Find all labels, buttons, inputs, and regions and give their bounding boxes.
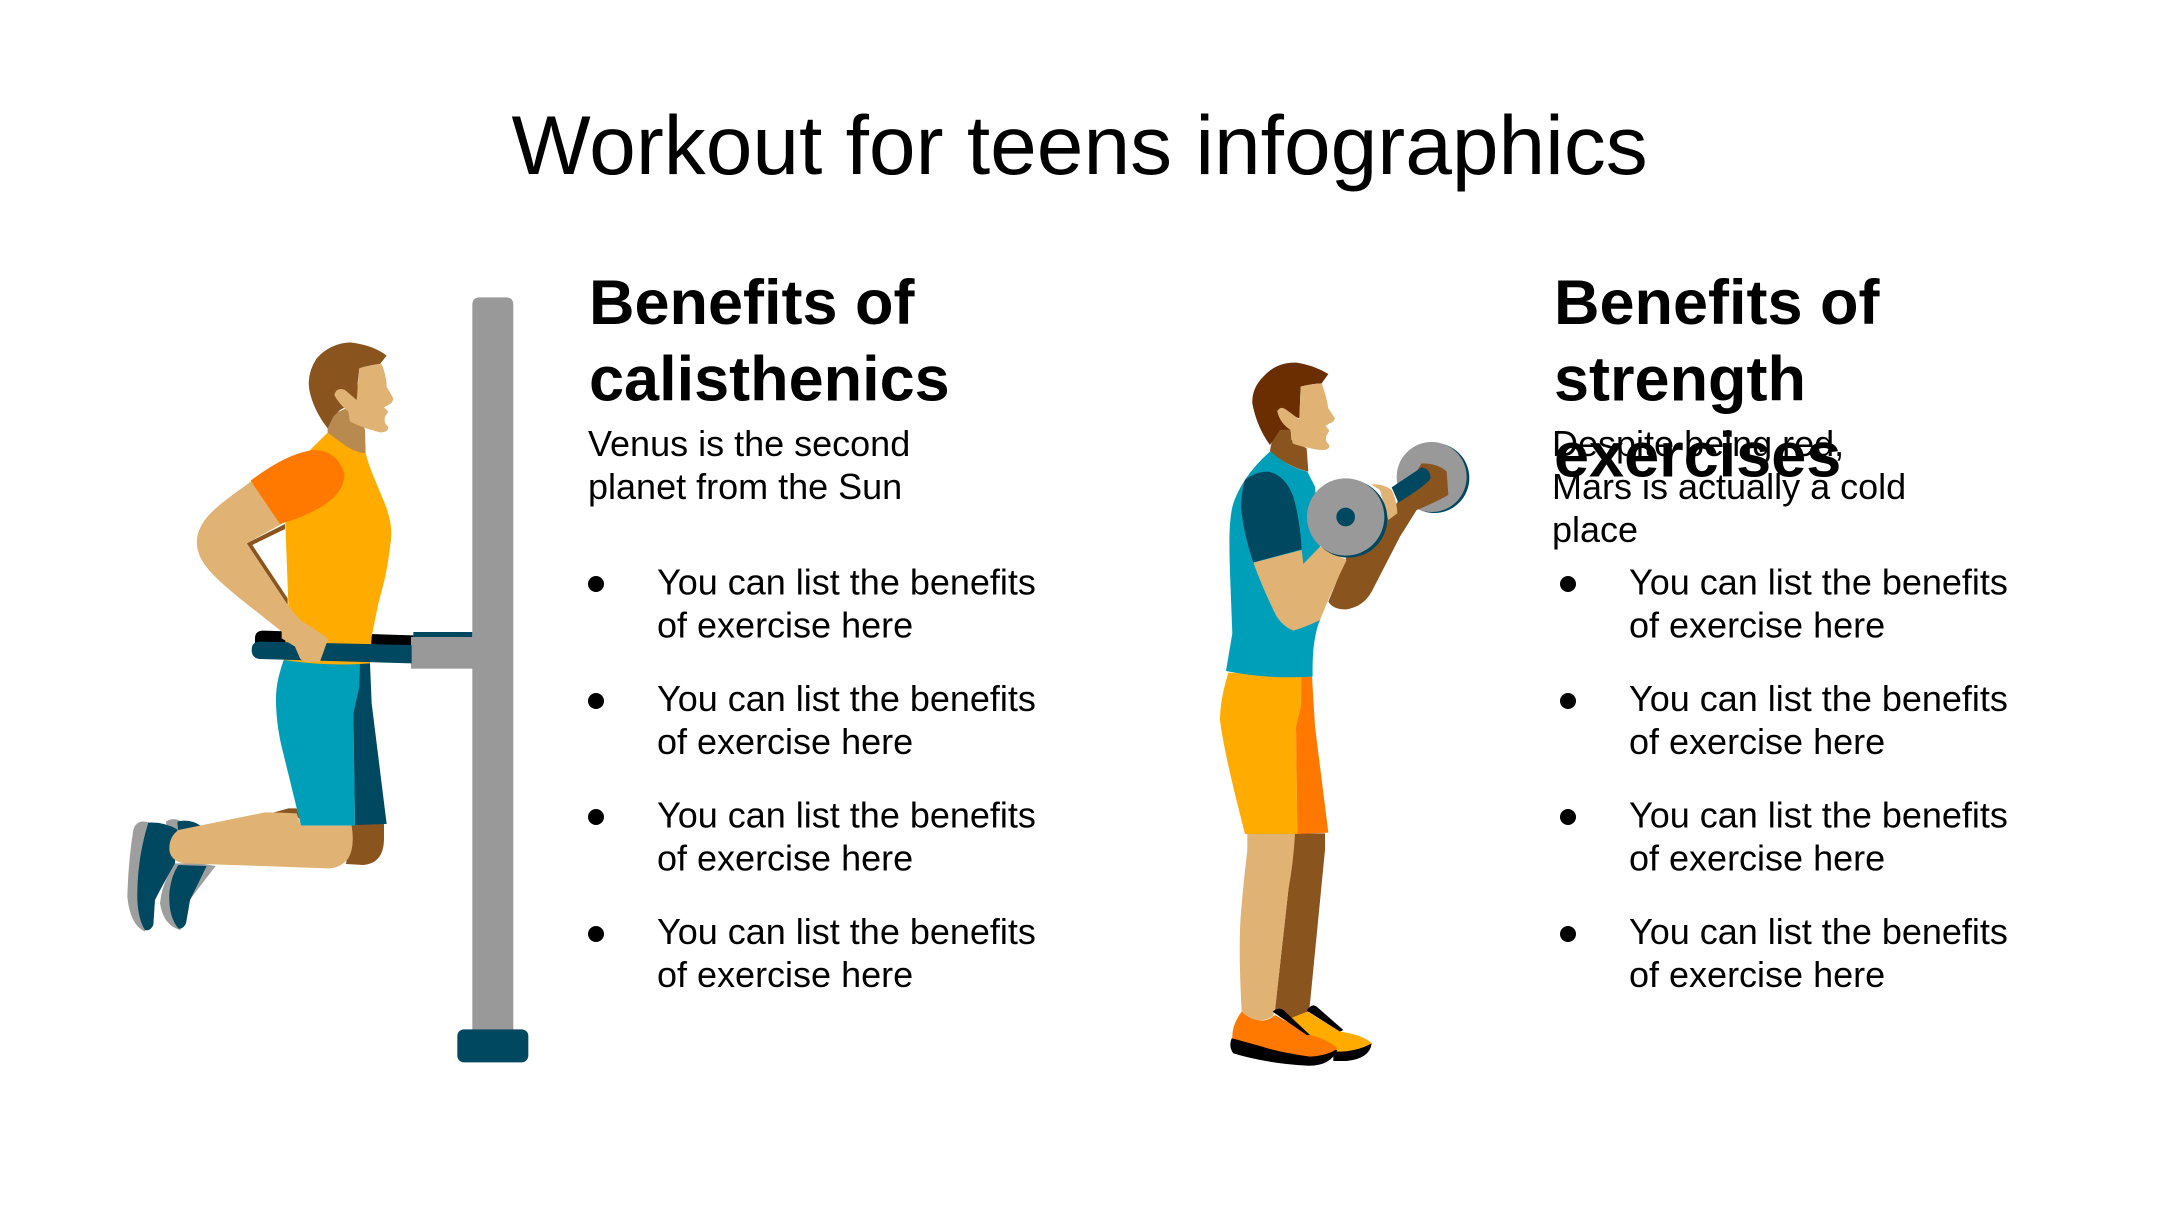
bullet list: strength benefits: You can list the benefits: [1629, 678, 2008, 719]
bullet list: calisthenics benefits: of exercise here: [657, 954, 913, 995]
text: Mars description: Mars is actually a cold: [1552, 466, 1906, 507]
bullet list: strength benefits: of exercise here: [1629, 604, 1885, 646]
bullet list: calisthenics benefits: of exercise here: [657, 838, 913, 878]
illustration: man doing bar dips: [127, 297, 528, 1062]
heading: calisthenics: Benefits of: [589, 268, 916, 338]
bullet list: strength benefits: You can list the benefits: [1629, 911, 2008, 952]
bullet list: calisthenics benefits: You can list the benefits: [657, 678, 1036, 719]
heading: strength exercises: strength: [1554, 344, 1806, 414]
heading: strength exercises: exercises: [1554, 420, 1841, 490]
bullet list: strength benefits: of exercise here: [1629, 954, 1885, 995]
dip bar equipment: [255, 297, 528, 1062]
bullet list: calisthenics benefits: You can list the benefits: [657, 911, 1036, 952]
heading: strength exercises: Benefits of: [1554, 268, 1881, 338]
bullet list: strength benefits: of exercise here: [1629, 838, 1885, 878]
bullet list: strength benefits: You can list the benefits: [1629, 562, 2008, 602]
text: Venus description: [588, 423, 910, 507]
text: Venus description: Venus is the second: [588, 423, 910, 464]
text: Mars description: Despite being red,: [1552, 423, 1844, 464]
text: Mars description: [1552, 423, 1906, 550]
title: Workout for teens infographics: [512, 98, 1648, 192]
text: Venus description: planet from the Sun: [588, 466, 902, 507]
bullet list: calisthenics benefits: You can list the benefits: [657, 562, 1036, 602]
bullet list: calisthenics benefits: You can list the benefits: [657, 794, 1036, 836]
torso, head and dumbbell: [1226, 363, 1469, 677]
illustration: man lifting dumbbell: [1220, 363, 1469, 1066]
shorts and legs: [127, 659, 387, 932]
torso, arm and head: [197, 342, 412, 664]
bullet list: strength benefits: [1560, 562, 2008, 995]
bullet list: calisthenics benefits: of exercise here: [657, 721, 913, 762]
bullet list: calisthenics benefits: [588, 562, 1036, 995]
bullet list: strength benefits: of exercise here: [1629, 721, 1885, 762]
heading: calisthenics: [589, 268, 950, 414]
heading: strength exercises: [1554, 268, 1881, 490]
bullet list: calisthenics benefits: of exercise here: [657, 604, 913, 646]
text: Mars description: place: [1552, 509, 1638, 550]
bullet list: strength benefits: You can list the benefits: [1629, 794, 2008, 836]
legs and shoes: [1220, 673, 1372, 1066]
heading: calisthenics: calisthenics: [589, 344, 950, 414]
